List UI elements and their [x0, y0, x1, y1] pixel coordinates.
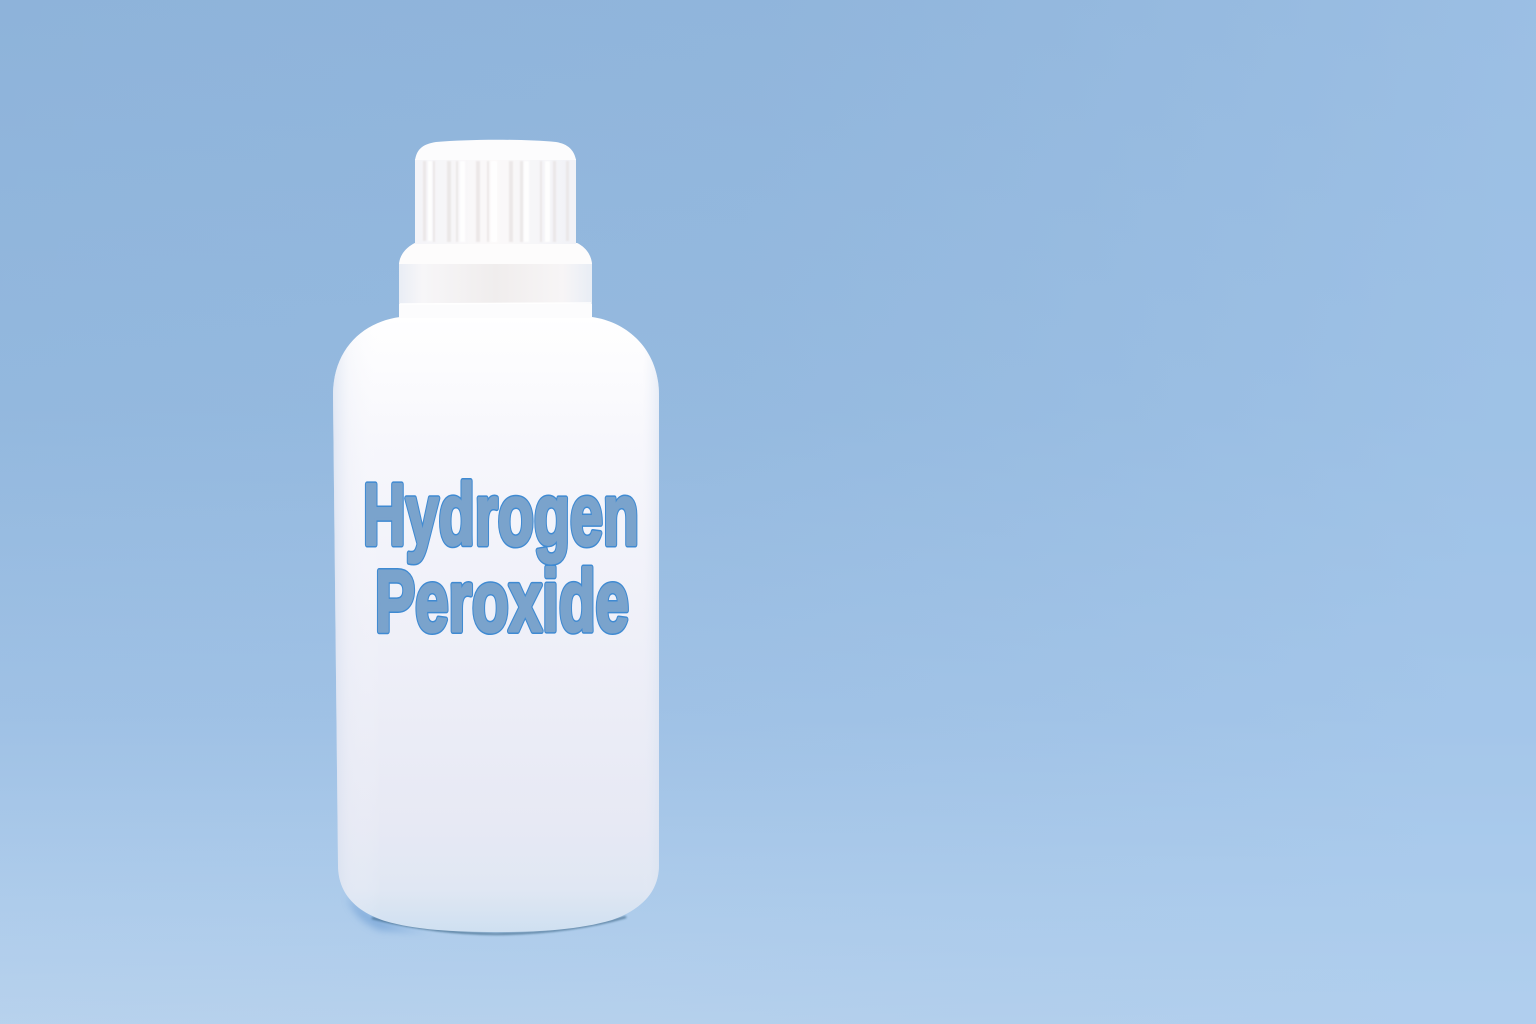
label fill: Hydrogen: [363, 466, 639, 564]
label outline: [363, 466, 639, 650]
label fill: [363, 466, 639, 650]
bottle: [333, 140, 659, 932]
label outline: Hydrogen: [363, 466, 639, 564]
cap ribs: [423, 161, 569, 242]
bottle body: [333, 317, 659, 932]
contact shadow under bottle: [348, 895, 626, 934]
bottle collar: [399, 243, 592, 318]
label text: Hydrogen Peroxide: [363, 466, 639, 650]
bottle cap: [415, 140, 576, 244]
label fill: Peroxide: [375, 553, 629, 650]
label outline: Peroxide: [375, 553, 629, 650]
